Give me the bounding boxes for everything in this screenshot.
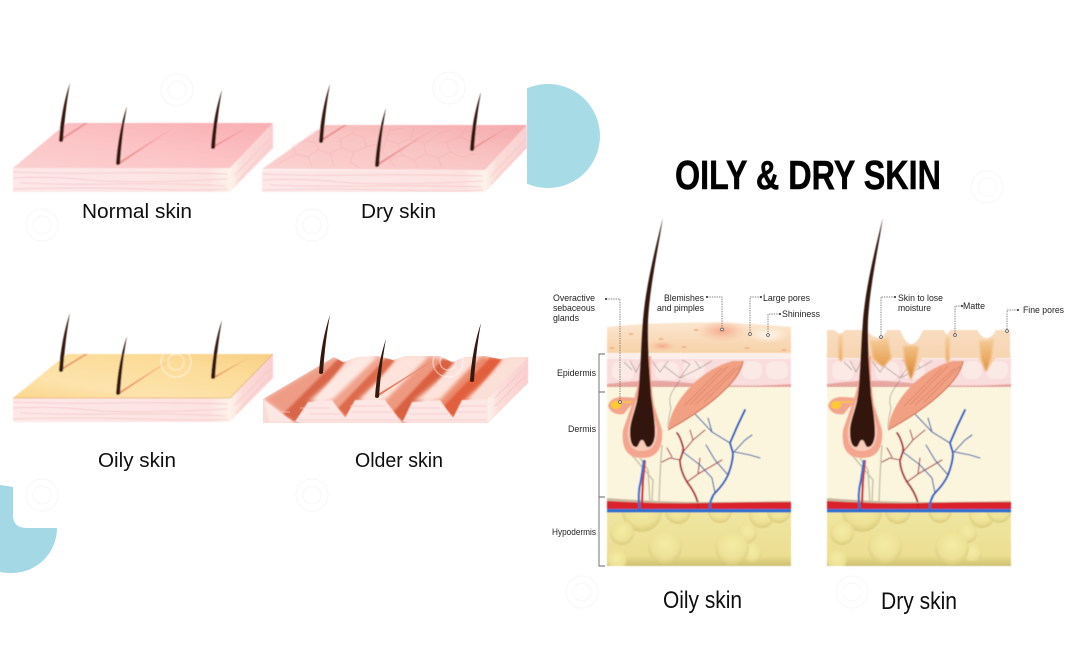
callout: shininess: Shininess	[782, 309, 820, 320]
oily surface layer	[607, 320, 791, 353]
callout: shininess	[767, 309, 820, 336]
callout: matte: Matte	[963, 301, 985, 312]
diagram: oily skin cross-section	[607, 218, 791, 570]
callout: blemishes and pimples: Blemishes	[664, 293, 704, 304]
callout: blemishes and pimples	[657, 293, 723, 331]
diagram: dry skin cross-section	[827, 218, 1011, 570]
title: OILY & DRY SKIN	[675, 152, 941, 198]
callout: overactive sebaceous glands: Overactive	[553, 293, 595, 304]
panel: dry skin block	[262, 84, 527, 192]
panel: older skin block	[263, 315, 529, 425]
layer labels: Hypodermis	[552, 527, 596, 538]
label: dry skin diagram: Dry skin	[881, 588, 957, 615]
callout: matte	[954, 301, 985, 336]
background watermarks	[26, 72, 1003, 608]
callout: blemishes and pimples: and pimples	[657, 303, 704, 314]
panel: oily skin block	[13, 313, 273, 422]
layer labels: Dermis	[568, 424, 596, 435]
label: dry skin: Dry skin	[361, 201, 436, 223]
callout: overactive sebaceous glands: sebaceous	[553, 303, 595, 314]
dry wrinkled surface layer	[827, 330, 1010, 380]
callout: skin to lose moisture	[880, 293, 943, 338]
label: oily skin: Oily skin	[98, 450, 176, 472]
label: normal skin: Normal skin	[82, 201, 192, 223]
skin layers, vessels and fat: oily	[607, 353, 791, 570]
hair follicle, muscle and gland: dry	[828, 218, 963, 458]
callout: skin to lose moisture: Skin to lose	[898, 293, 943, 304]
callout: fine pores	[1006, 305, 1064, 332]
layer bracket	[599, 354, 605, 566]
callout: skin to lose moisture: moisture	[898, 303, 931, 314]
skin layers, vessels and fat: dry	[827, 353, 1011, 570]
callout: large pores: Large pores	[763, 293, 810, 304]
callout: large pores	[749, 293, 810, 335]
decorative quarter shape bottom-left	[0, 485, 57, 573]
callout: fine pores: Fine pores	[1023, 305, 1064, 316]
layer labels: Epidermis	[557, 368, 596, 379]
label: oily skin diagram: Oily skin	[663, 587, 742, 614]
panel: normal skin block	[13, 83, 273, 192]
decorative semicircle top	[527, 84, 600, 188]
callout: overactive sebaceous glands	[553, 293, 621, 403]
callout: overactive sebaceous glands: glands	[553, 313, 579, 324]
label: older skin: Older skin	[355, 450, 443, 472]
hair follicle, muscle and gland: oily	[608, 218, 743, 458]
layer labels	[552, 368, 596, 538]
